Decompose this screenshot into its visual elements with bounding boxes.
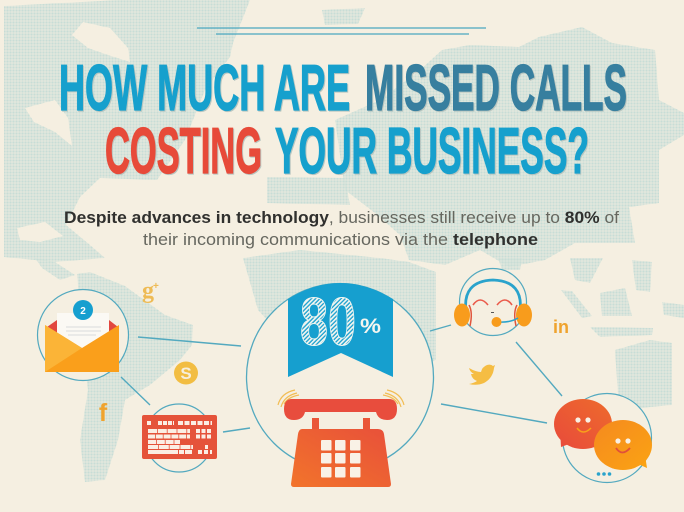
banner: 80 percent: % [360,315,381,338]
title [59,51,627,187]
icon: google plus: + [153,281,159,292]
icon: envelope with notification [38,290,128,380]
icon: ringing arcs [278,390,404,407]
icon: skype [174,362,198,384]
icon: facebook: f [99,399,108,427]
subtitle: Despite advances in technology , businesses still receive up to 80% of [64,209,619,227]
banner: 80 percent: 80 [300,284,356,360]
panel: central 80% telephone [246,283,434,487]
icon: chat bubbles [554,394,652,482]
icon: skype: S [180,364,192,383]
icon: envelope with notification: 2 [80,306,86,317]
subtitle: their incoming communications via the telephone [143,231,538,249]
icon: keyboard [142,404,217,472]
subtitle [64,209,619,249]
icon: twitter [469,365,495,385]
icon: google plus: g [142,278,154,304]
connector lines [121,325,562,432]
title: COSTING [105,114,262,187]
icon: telephone [284,399,397,487]
banner: 80 percent [288,283,393,377]
icon: linkedin: in [553,317,569,337]
title: HOW MUCH ARE [59,51,350,124]
top decorative lines [197,28,486,34]
icon: headset agent [454,268,532,336]
